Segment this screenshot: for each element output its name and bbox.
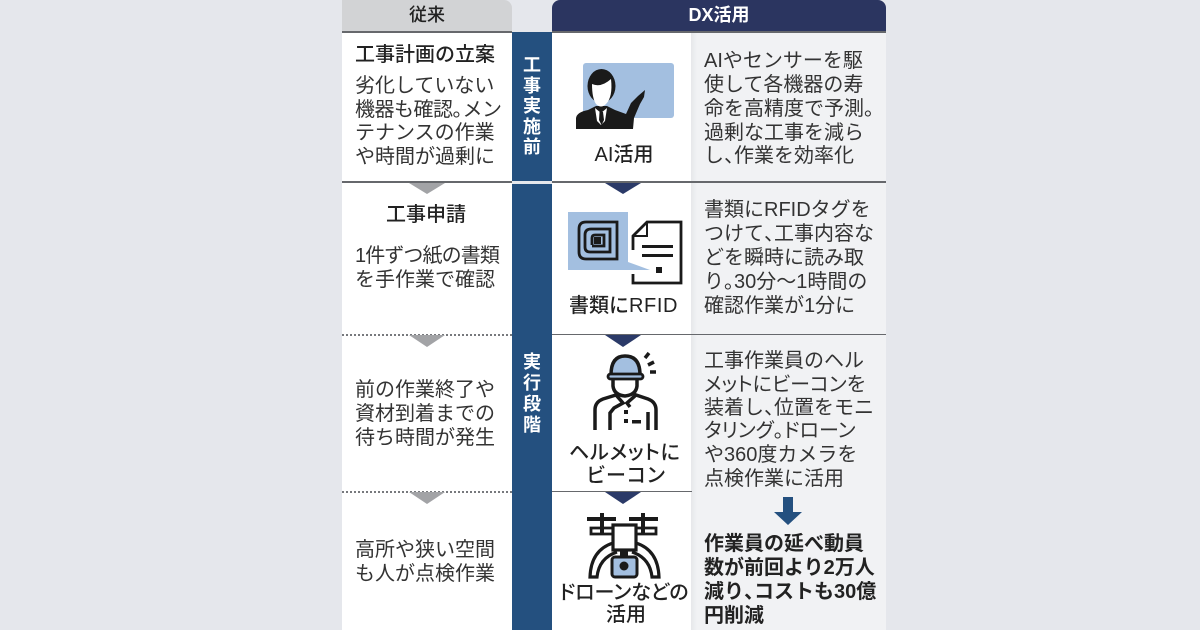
text: application problem [355,245,500,291]
heading: construction planning: 工事計画の立案 [355,44,495,66]
phase bar: before construction: 実 [523,96,541,116]
icon: drone [587,513,661,579]
arrow: navy step 1 [605,183,641,194]
text: beacon and drone solution: メットにビーコンを [704,374,865,396]
phase bar: execution stage: 階 [523,415,541,435]
text: planning problem: テナンスの作業 [355,122,495,144]
label: drones [559,582,689,626]
header: conventional [342,0,512,31]
label: beacon on helmet: ビーコン [586,465,666,487]
label: RFID on documents: 書類にRFID [569,295,678,317]
label: beacon on helmet [569,442,681,487]
text: RFID solution [704,199,874,317]
phase bar: execution stage: 行 [523,373,541,393]
text: waiting time problem [355,378,495,448]
text: AI solution: AIやセンサーを駆 [704,50,863,72]
text: waiting time problem: 待ち時間が発生 [355,426,495,448]
text: application problem: 1件ずつ紙の書類 [355,245,499,267]
text: result summary: 円削減 [704,604,764,626]
text: AI solution [704,50,884,167]
text: planning problem: や時間が過剰に [355,146,495,168]
text: beacon and drone solution: タリング。ドローン [704,420,856,442]
phase bar: execution stage: 段 [523,394,541,414]
text: result summary: 作業員の延べ動員 [704,533,864,555]
phase bar: before construction: 施 [523,117,541,137]
arrow: navy step 2 [605,335,641,347]
text: AI solution: 命を高精度で予測。 [704,98,884,120]
arrow: navy step 3 [605,492,641,504]
text: beacon and drone solution [704,350,874,490]
arrow: gray step 3 [409,492,445,504]
text: RFID solution: つけて、工事内容な [704,223,874,245]
text: application problem: を手作業で確認 [355,269,495,291]
text: RFID solution: どを瞬時に読み取 [704,247,864,269]
header: DX: DX活用 [688,5,750,25]
text: RFID solution: 書類にRFIDタグを [704,199,871,221]
arrow: gray step 2 [409,335,445,347]
panel: DX description column background [691,32,886,630]
text: AI solution: 使して各機器の寿 [704,74,863,96]
text: planning problem [355,75,502,168]
icon: worker with beacon helmet [593,352,658,430]
text: RFID solution: 確認作業が1分に [704,295,855,317]
text: inspection problem: 高所や狭い空間 [355,539,495,561]
text: planning problem: 機器も確認。メン [355,98,502,120]
phase bar: before construction [512,32,552,181]
icon: RFID tag and document [568,212,682,284]
text: beacon and drone solution: 装着し、位置をモニ [704,397,874,419]
panel: conventional column background [342,32,512,630]
arrow: result [774,497,802,525]
icon: AI presenter [576,63,674,129]
text: beacon and drone solution: 工事作業員のヘル [704,350,864,372]
text: waiting time problem: 前の作業終了や [355,378,495,400]
header: conventional: 従来 [409,5,445,25]
heading: construction application: 工事申請 [386,204,466,226]
text: beacon and drone solution: や360度カメラを [704,444,857,466]
arrow: gray step 1 [409,183,445,194]
text: planning problem: 劣化していない [355,75,494,97]
header: DX [552,0,886,31]
phase bar: before construction: 前 [523,137,541,157]
text: RFID solution: り。30分～1時間の [704,271,867,293]
label: AI use: AI活用 [595,144,653,166]
label: drones: ドローンなどの [559,582,689,604]
phase bar: before construction: 事 [523,76,541,96]
panel: DX icon column background [552,32,691,630]
text: inspection problem [355,539,495,584]
text: AI solution: 過剰な工事を減ら [704,122,864,144]
phase bar: execution stage: 実 [523,352,541,372]
text: result summary: 減り、コストも30億 [704,580,876,602]
text: result summary [704,532,876,626]
label: beacon on helmet: ヘルメットに [569,442,681,464]
text: beacon and drone solution: 点検作業に活用 [704,468,844,490]
text: inspection problem: も人が点検作業 [355,562,495,584]
phase bar: before construction: 工 [523,55,541,75]
label: drones: 活用 [606,604,646,626]
text: result summary: 数が前回より2万人 [704,556,875,578]
text: waiting time problem: 資材到着までの [355,402,495,424]
phase bar: execution stage [512,184,552,630]
text: AI solution: し、作業を効率化 [704,145,854,167]
